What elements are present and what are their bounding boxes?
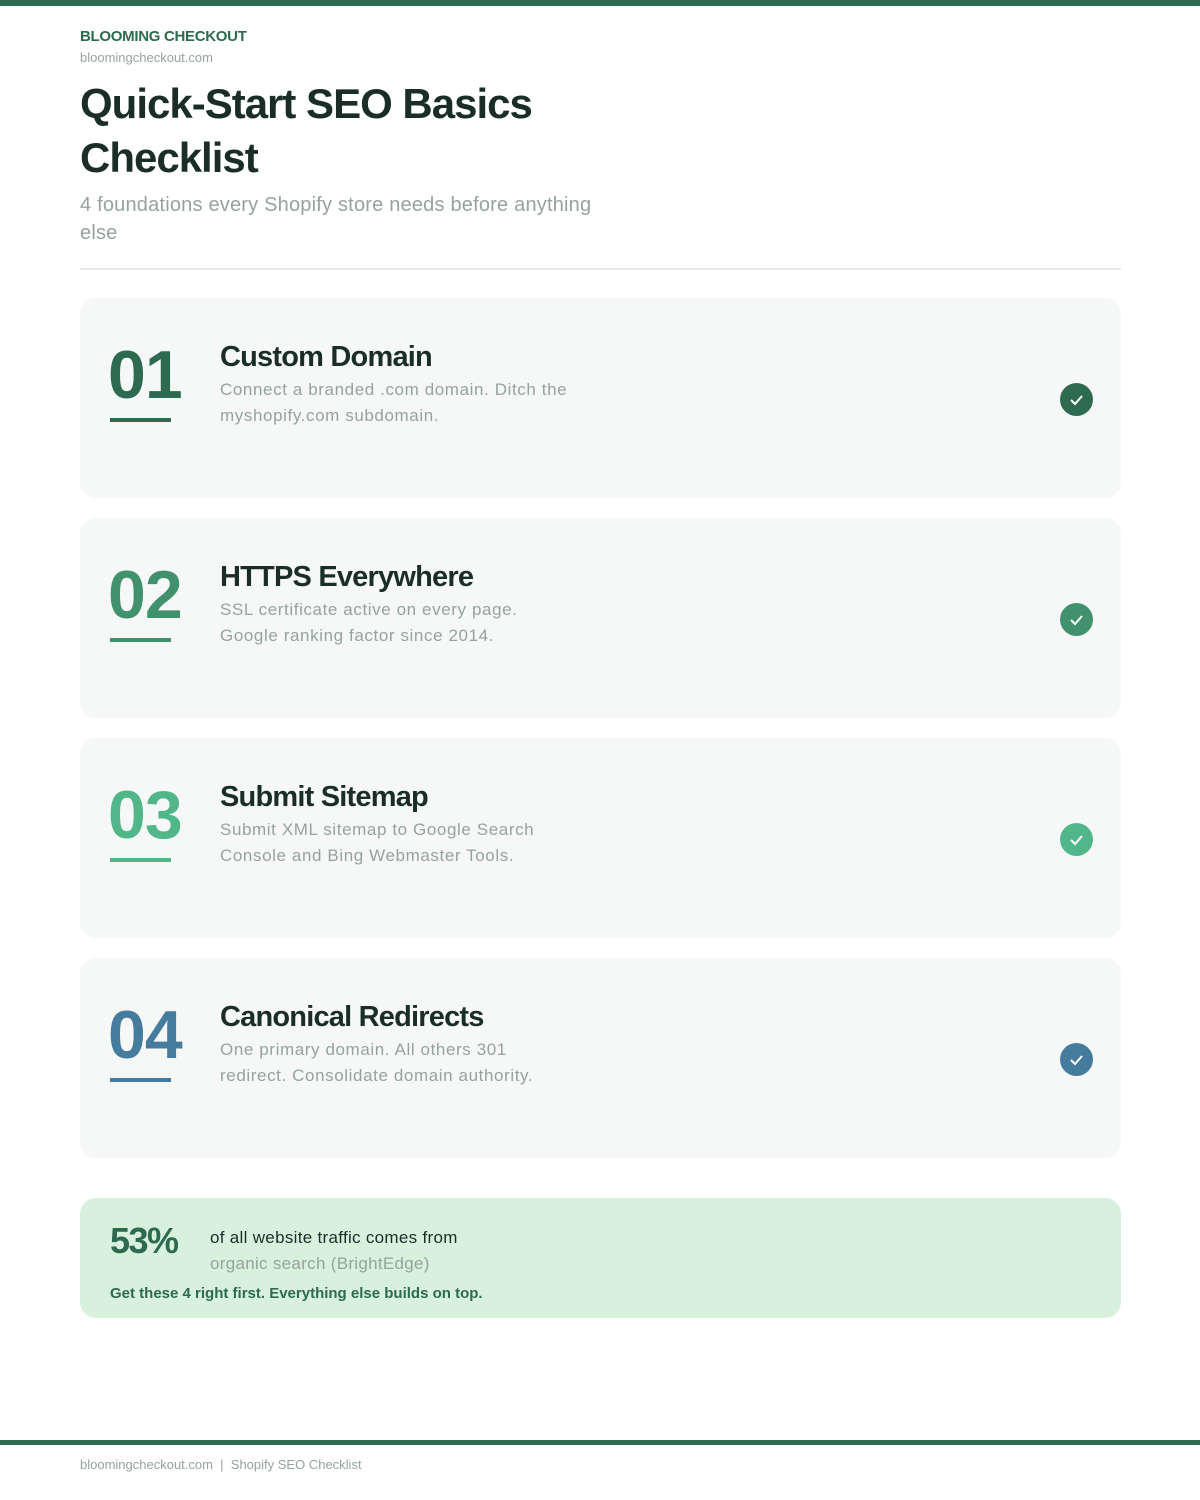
description [220, 600, 518, 645]
heading: Canonical Redirects [220, 1001, 484, 1033]
heading: Custom Domain [220, 341, 432, 373]
stat number: 53% [110, 1220, 178, 1261]
card 02 [80, 518, 1121, 718]
heading: HTTPS Everywhere [220, 561, 473, 593]
icon: check [1060, 603, 1093, 636]
takeaway: Get these 4 right first. Everything else builds on top. [110, 1285, 483, 1302]
card 03 [80, 738, 1121, 938]
top bar [0, 0, 1200, 6]
description: Connect a branded .com domain. Ditch the myshopify.com subdomain. [220, 380, 567, 425]
card 01 [80, 298, 1121, 498]
title: Quick-Start SEO Basics Checklist [80, 80, 532, 181]
card 04 [80, 958, 1121, 1158]
number 01: 01 [108, 337, 182, 413]
icon: check [1060, 823, 1093, 856]
description: One primary domain. All others 301 [220, 1040, 507, 1059]
icon: check [1060, 1043, 1093, 1076]
icon: check [1060, 383, 1093, 416]
heading: Submit Sitemap [220, 781, 428, 813]
brand: BLOOMING CHECKOUT [80, 28, 247, 45]
stat text: organic search (BrightEdge) [210, 1254, 430, 1273]
description: Submit XML sitemap to Google Search [220, 820, 534, 839]
number 04: 04 [108, 997, 182, 1073]
callout: stat [80, 1198, 1121, 1318]
number 02: 02 [108, 557, 182, 633]
description: Console and Bing Webmaster Tools. [220, 846, 514, 865]
subtitle: 4 foundations every Shopify store needs before anything else [80, 194, 591, 244]
stat text [210, 1228, 458, 1273]
stat text: of all website traffic comes from [210, 1228, 458, 1247]
description: Google ranking factor since 2014. [220, 626, 494, 645]
description: SSL certificate active on every page. [220, 600, 518, 619]
brand url: bloomingcheckout.com [80, 50, 213, 65]
description [220, 820, 534, 865]
bottom bar [0, 1440, 1200, 1445]
description [220, 1040, 533, 1085]
number 03: 03 [108, 777, 182, 853]
footer: bloomingcheckout.com | Shopify SEO Checklist [80, 1457, 362, 1472]
description: redirect. Consolidate domain authority. [220, 1066, 533, 1085]
